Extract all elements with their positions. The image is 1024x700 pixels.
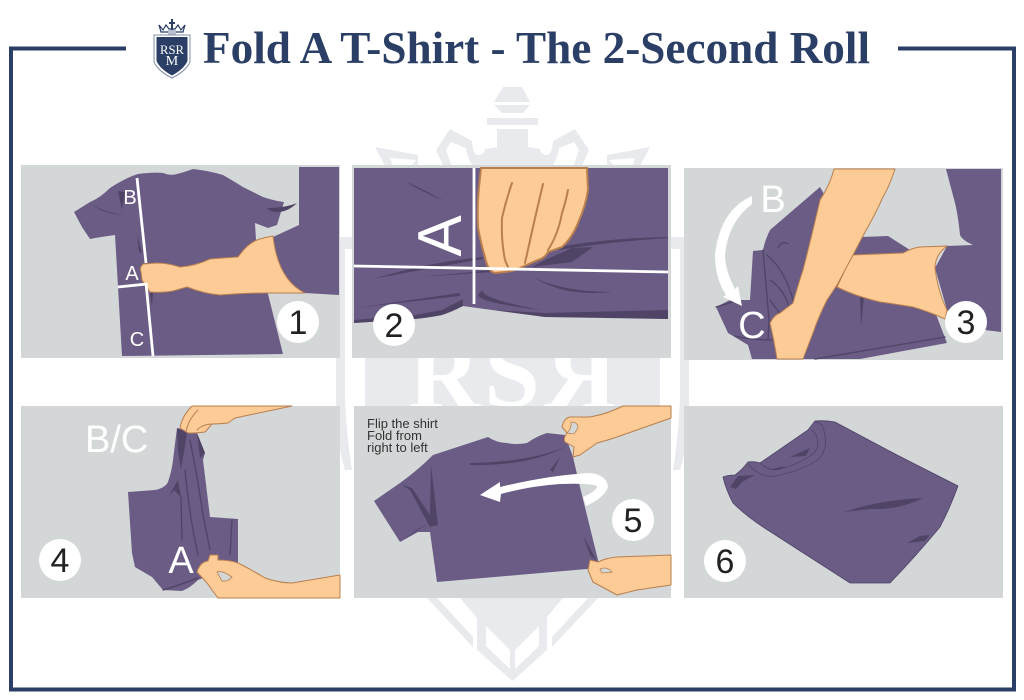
shirt bbox=[128, 428, 238, 591]
instruction text: Flip the shirt bbox=[367, 416, 438, 431]
bottom hand bbox=[588, 555, 671, 595]
panel 4 bbox=[21, 406, 340, 598]
step number: 3 bbox=[957, 304, 975, 342]
instruction text: right to left bbox=[367, 440, 428, 455]
step number: 4 bbox=[51, 542, 69, 580]
vertical arm bbox=[770, 169, 895, 359]
fold labels: C bbox=[130, 329, 144, 351]
shirt bbox=[374, 433, 598, 582]
logo: RSR bbox=[160, 42, 184, 57]
fold label: A bbox=[406, 215, 475, 257]
fold labels: B bbox=[123, 187, 137, 209]
fold labels: B bbox=[760, 179, 786, 221]
step number bbox=[277, 301, 319, 343]
step number: 1 bbox=[289, 304, 307, 342]
panel 6 bbox=[684, 406, 1003, 598]
fold labels: A bbox=[125, 263, 139, 285]
step number: 5 bbox=[624, 502, 642, 540]
top hand bbox=[180, 406, 292, 433]
fold lines bbox=[354, 168, 668, 304]
folded shirt bbox=[723, 421, 958, 583]
fold labels: A bbox=[168, 540, 194, 582]
panel 1 bbox=[21, 165, 340, 358]
fold labels: B/C bbox=[85, 419, 148, 461]
shirt bbox=[716, 187, 947, 359]
watermark shield: S bbox=[484, 317, 540, 428]
step number: 2 bbox=[385, 307, 403, 345]
curved arrow bbox=[480, 473, 608, 506]
watermark shield: R bbox=[543, 319, 617, 430]
bottom hand bbox=[197, 555, 340, 598]
step number bbox=[373, 304, 415, 346]
logo: M bbox=[166, 54, 179, 69]
panel 3 bbox=[684, 168, 1003, 360]
step number: 6 bbox=[716, 543, 734, 581]
fold labels bbox=[123, 187, 144, 351]
fold labels bbox=[85, 419, 194, 582]
top hand bbox=[562, 406, 671, 457]
logo bbox=[154, 19, 190, 78]
watermark shield bbox=[336, 87, 689, 681]
curved arrow bbox=[715, 196, 752, 306]
fold lines bbox=[118, 178, 153, 356]
shirt bbox=[74, 169, 284, 356]
title: Fold A T-Shirt - The 2-Second Roll bbox=[203, 22, 870, 73]
arm bbox=[140, 236, 305, 295]
horizontal arm bbox=[837, 246, 947, 319]
panel 5 bbox=[354, 406, 671, 598]
sleeve bbox=[935, 169, 1001, 332]
step number bbox=[704, 540, 746, 582]
shirt bbox=[354, 168, 668, 323]
watermark shield: R bbox=[408, 319, 482, 430]
sleeve and body bbox=[273, 167, 339, 295]
fold labels: C bbox=[738, 305, 766, 347]
instruction text: Fold from bbox=[367, 428, 422, 443]
hand bbox=[478, 168, 588, 273]
step number bbox=[39, 539, 81, 581]
step number bbox=[945, 301, 987, 343]
fold labels bbox=[738, 179, 786, 347]
panel 2 bbox=[352, 165, 671, 358]
step number bbox=[612, 499, 654, 541]
